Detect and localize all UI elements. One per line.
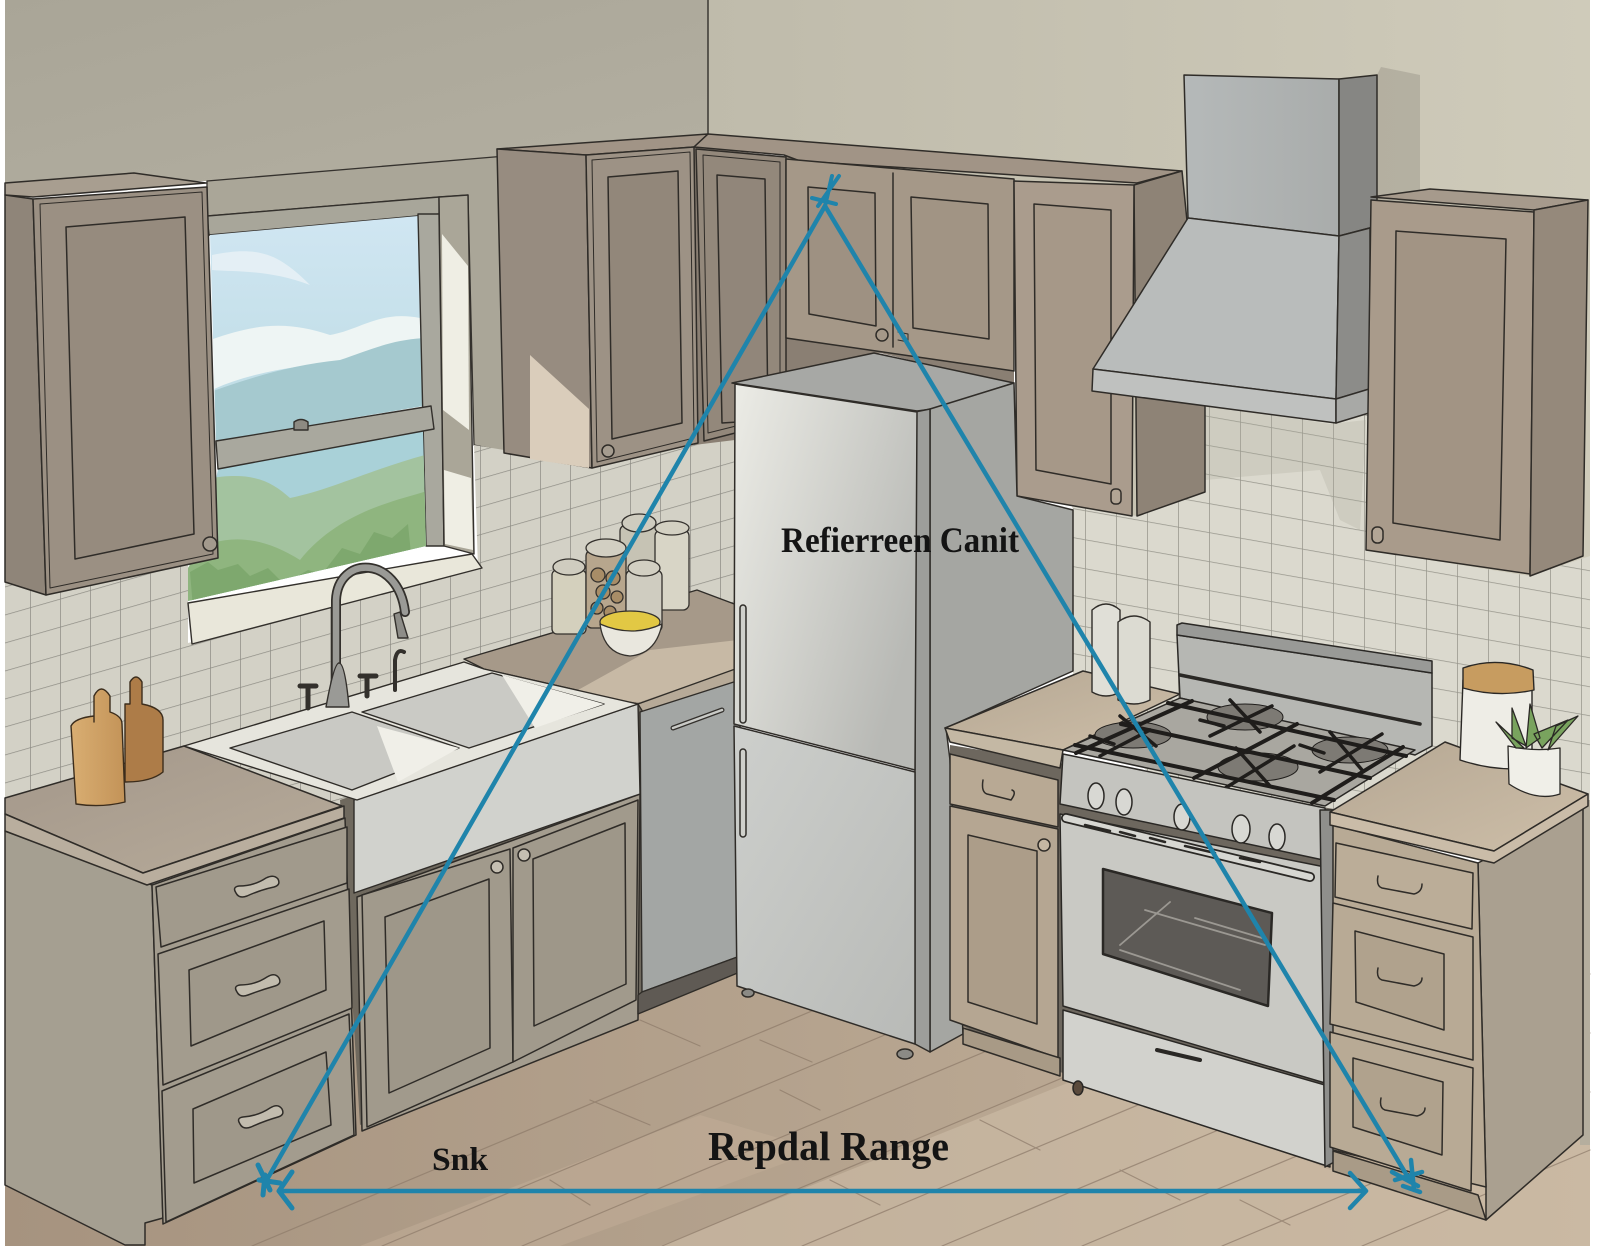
sink arrowhead: [258, 1165, 292, 1208]
fridge to range leg: [825, 206, 1409, 1179]
cooktop: [1063, 698, 1415, 806]
middle drawer: [158, 889, 352, 1085]
faucet base: [326, 663, 349, 707]
right jamb: [418, 214, 444, 546]
right tap: [360, 676, 376, 696]
door: [950, 806, 1058, 1058]
spray head: [394, 612, 408, 638]
apex arrowhead: [812, 176, 839, 206]
small spout: [395, 651, 404, 690]
cabinet front: [152, 818, 356, 1224]
double door cabinet: [786, 159, 1014, 371]
door knobs: [491, 861, 503, 873]
oven handle: [1066, 818, 1310, 877]
wooden cutting boards: [71, 677, 163, 806]
side panel: [1478, 808, 1583, 1220]
door edge strip: [915, 409, 930, 1052]
oven door: [1060, 814, 1325, 1083]
drawer handle: [1157, 1050, 1200, 1060]
right wall: [708, 0, 1590, 620]
faucet: [300, 568, 408, 708]
small canister: [552, 570, 586, 634]
back guard cap: [1177, 623, 1432, 673]
left base cabinet: [5, 746, 356, 1245]
left countertop: [5, 746, 342, 873]
drawer: [950, 754, 1058, 827]
cornice strip: [694, 134, 1182, 183]
round cookies: [591, 568, 623, 618]
left basin: [230, 712, 459, 790]
right base cabinet: [1330, 742, 1588, 1220]
wall corner line: [707, 0, 709, 134]
meeting rail: [216, 406, 434, 469]
burner grates: [1075, 700, 1406, 803]
oven racks: [1120, 902, 1265, 990]
salt and pepper bottles: [1092, 604, 1150, 704]
hood shadow on wall: [1377, 67, 1420, 226]
lower glass view: [188, 432, 426, 601]
top drawer: [156, 827, 347, 947]
cabinet side: [5, 831, 163, 1245]
window: [180, 195, 482, 644]
left door: [362, 849, 513, 1127]
window frame top: [207, 197, 439, 235]
side face: [930, 383, 1073, 1052]
potted plant: [1496, 704, 1578, 796]
label: range leg: Repdal Range: [708, 1123, 949, 1169]
corner cabinet top: [497, 134, 708, 155]
right basin: [362, 673, 604, 748]
backsplash: left wall tiles: [5, 430, 745, 840]
backsplash: right wall tiles: [1073, 405, 1590, 860]
sink to range leg: [280, 1189, 1362, 1193]
left tap: [300, 686, 316, 708]
range-side cabinet: [945, 671, 1180, 1076]
storage jar with wooden lid: [1460, 662, 1534, 769]
back counter: [464, 590, 745, 704]
side strip: [1320, 810, 1338, 1167]
back board: [125, 677, 163, 782]
right countertop edge: [1330, 794, 1588, 863]
shadow backing behind upper cabinets: [694, 147, 1014, 445]
front panel: [1333, 825, 1486, 1187]
bowl of lemons: [600, 611, 662, 656]
control knobs: [1088, 783, 1285, 850]
cookie jar: [586, 550, 626, 628]
toe kick: [963, 1028, 1060, 1076]
toe kick: [1333, 1151, 1486, 1220]
side counter: [945, 671, 1180, 750]
right door: [513, 800, 638, 1062]
upper glass view: [210, 216, 425, 445]
bottom drawer: [162, 1014, 354, 1222]
storage drawer: [1063, 1010, 1330, 1167]
sunlit reveal: [439, 195, 474, 554]
vent slots: [1085, 825, 1260, 862]
oven window: [1103, 869, 1272, 1006]
lower door: [734, 726, 915, 1044]
window sill: [188, 554, 482, 644]
label: refrigerator point: Refierreen Canit: [781, 520, 1019, 560]
narrow canister: [626, 570, 662, 632]
upper handle: [740, 605, 746, 723]
soffit band above window: [207, 156, 506, 452]
second corner cabinet: [696, 149, 786, 441]
range arrowhead: [1350, 1173, 1366, 1208]
soft shadow on tiles under hood: [1205, 405, 1366, 530]
range foot: [1073, 1081, 1083, 1095]
sink to fridge leg: [265, 206, 825, 1183]
top drawer: [1335, 843, 1473, 929]
sunlight patch on back counter: [560, 640, 738, 702]
right countertop: [1330, 742, 1588, 851]
back counter edge: [638, 668, 738, 712]
tall glass canister: [620, 525, 658, 580]
middle drawer: [1330, 903, 1473, 1060]
dishwasher: [638, 680, 740, 1014]
left wall: [5, 0, 708, 183]
under-sink cabinet: [357, 794, 640, 1131]
shadow backing behind range: [950, 745, 1340, 1160]
range hood: [1092, 75, 1377, 423]
front board: [71, 689, 125, 806]
left wall cabinet: [5, 173, 218, 595]
left countertop edge: [5, 806, 344, 885]
back guard slot: [1180, 675, 1420, 724]
control panel: [1060, 754, 1328, 861]
top face: [732, 353, 1014, 411]
slim canister: [655, 530, 689, 610]
upper cabinets: [5, 75, 1588, 595]
refrigerator: [732, 353, 1073, 1059]
canisters: [552, 514, 689, 656]
sash latch: [294, 420, 308, 430]
label: sink point: Snk: [432, 1142, 489, 1178]
right edge wall strip: [1580, 800, 1590, 1145]
tall cabinet beside range: [1014, 171, 1205, 516]
fridge feet: [742, 989, 754, 997]
right wall cabinet: [1366, 189, 1588, 576]
farmhouse sink: [184, 662, 640, 893]
floor: [5, 900, 1590, 1246]
shadow backing behind sink cabinets: [340, 695, 650, 1125]
corner cabinet: [497, 147, 698, 468]
upper door: [734, 384, 917, 770]
lower handle: [740, 749, 746, 837]
bottom drawer: [1330, 1032, 1473, 1191]
work triangle lines: [258, 176, 1422, 1208]
back guard: [1177, 635, 1432, 755]
gas range: [1060, 623, 1432, 1167]
